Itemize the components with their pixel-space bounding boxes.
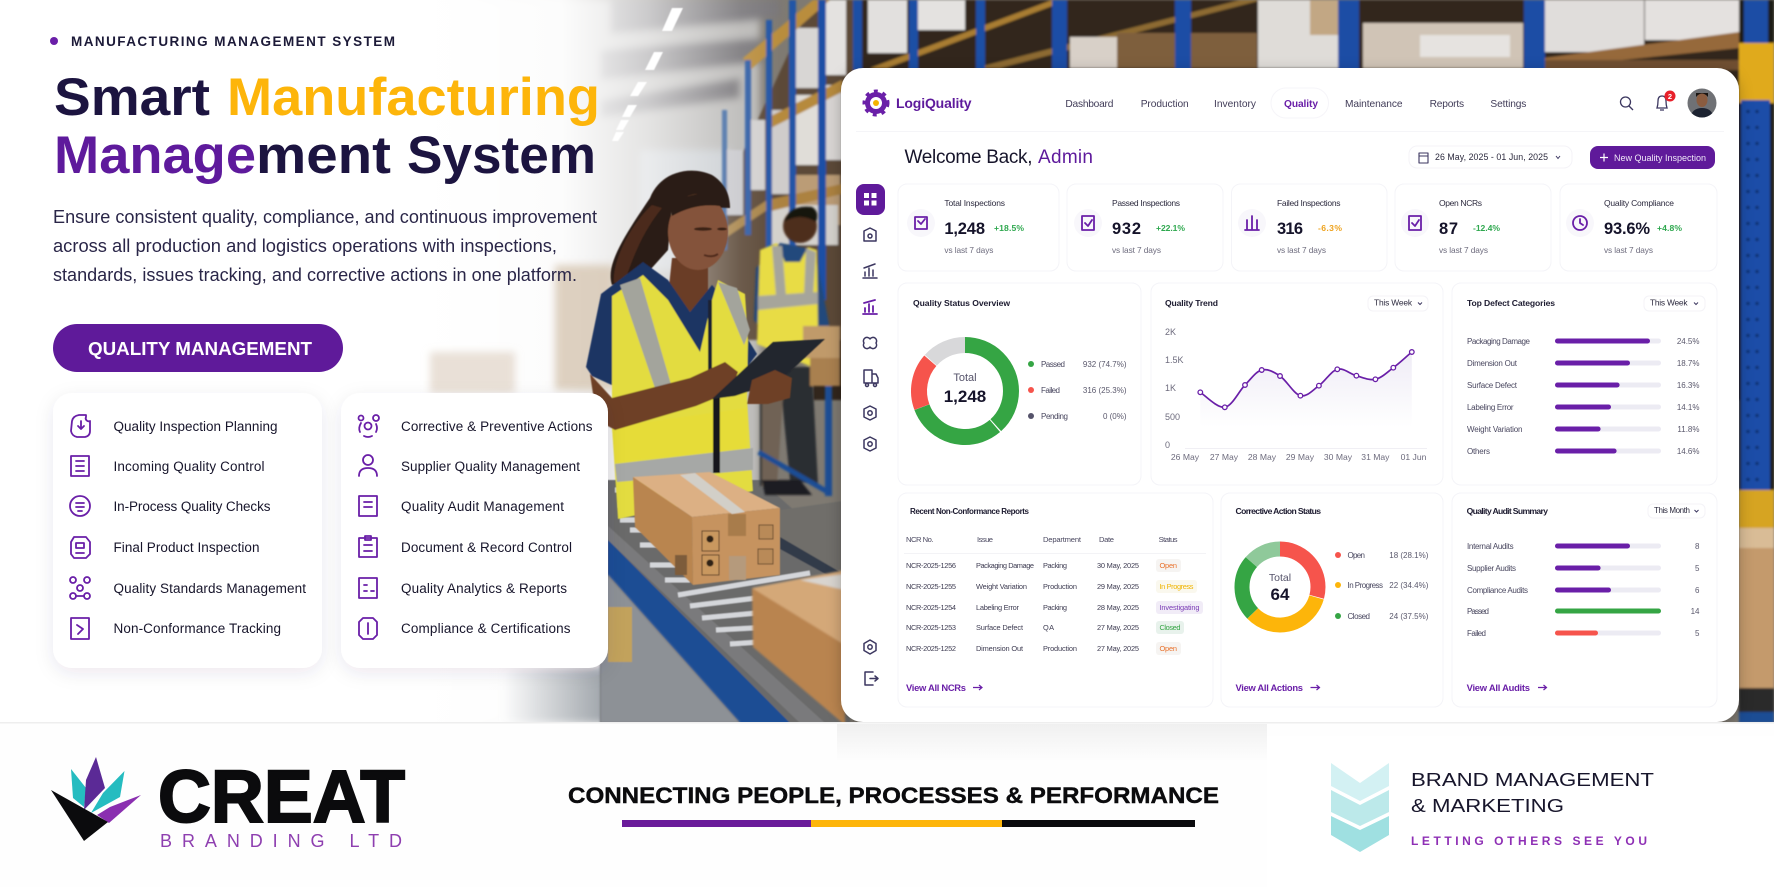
KPI: quality compliance — [1560, 184, 1717, 271]
bar chart: defects: Dimension Out — [1467, 359, 1518, 368]
panel: quality features left — [53, 393, 322, 668]
legend: status: 0 (0%) — [1103, 412, 1127, 421]
intro paragraph: Ensure consistent quality, compliance, and continuous improvement — [53, 207, 597, 227]
line chart: 01 Jun — [1401, 452, 1427, 462]
KPI: open NCRs: Open NCRs — [1439, 198, 1482, 208]
KPI: open NCRs: -12.4% — [1473, 223, 1500, 233]
feature: analytics — [359, 578, 567, 598]
panel: quality features right — [341, 393, 608, 668]
table row 5 — [906, 642, 1181, 655]
date range picker: 26 May, 2025 - 01 Jun, 2025 — [1435, 152, 1548, 162]
feature: incoming control — [71, 456, 264, 476]
KPI: total inspections: Total Inspections — [944, 198, 1005, 208]
table row 2: In Progress — [1160, 582, 1194, 591]
feature: inspection planning: Quality Inspection Planning — [114, 419, 278, 434]
welcome heading — [904, 147, 1093, 168]
line chart: 31 May — [1361, 452, 1390, 462]
KPI: total inspections — [898, 184, 1059, 271]
table row 3 — [906, 601, 1203, 614]
arms — [590, 362, 738, 430]
panel: quality status overview — [898, 283, 1141, 485]
KPI: failed inspections: -6.3% — [1318, 223, 1342, 233]
feature: incoming control: Incoming Quality Control — [114, 459, 264, 474]
brand: LogiQuality: LogiQuality — [896, 95, 972, 111]
tablet — [712, 339, 825, 399]
KPI: quality compliance: +4.8% — [1657, 223, 1682, 233]
link: view all actions: View All Actions — [1236, 682, 1303, 693]
table row 4: 27 May, 2025 — [1097, 623, 1139, 632]
KPI: passed inspections: vs last 7 days — [1112, 245, 1161, 255]
bar chart: audits — [1467, 542, 1700, 638]
line chart: 27 May — [1210, 452, 1239, 462]
button: quality management — [53, 324, 343, 372]
link: view all audits: View All Audits — [1467, 682, 1530, 693]
legend: status: Passed — [1041, 360, 1065, 369]
table header: Department — [1043, 535, 1082, 544]
panel: corrective action status: Total — [1269, 572, 1291, 584]
donut chart: actions — [1226, 533, 1334, 641]
filter: this week: This Week — [1374, 298, 1413, 308]
legend: status: 932 (74.7%) — [1083, 360, 1127, 369]
feature: compliance: Compliance & Certifications — [401, 621, 571, 636]
conveyor with rollers — [600, 480, 850, 730]
feature: in-process checks — [70, 496, 271, 516]
bar chart: audits: 6 — [1695, 586, 1700, 595]
panel: corrective action status — [1221, 493, 1443, 707]
bar chart: defects: Labeling Error — [1467, 403, 1514, 412]
date range picker — [1409, 146, 1572, 168]
KPI: quality compliance: Quality Compliance — [1604, 198, 1674, 208]
table row 1: Open — [1160, 561, 1177, 570]
filter: this week — [1368, 296, 1428, 311]
legend: actions: 24 (37.5%) — [1389, 612, 1429, 621]
hair — [611, 171, 730, 285]
bar chart: defects: 24.5% — [1677, 337, 1700, 346]
legend: status: Pending — [1041, 412, 1068, 421]
bar chart: defects: Surface Defect — [1467, 381, 1518, 390]
navigation: Reports — [1430, 99, 1464, 110]
KPI: failed inspections — [1232, 184, 1387, 271]
tagline — [568, 783, 1219, 827]
perspective shelves left of dashboard — [795, 28, 819, 88]
bar chart: audits: 8 — [1695, 542, 1700, 551]
navigation — [1065, 88, 1526, 118]
table row 4: NCR-2025-1253 — [906, 623, 956, 632]
table header: NCR No. — [906, 535, 934, 544]
feature: final inspection: Final Product Inspection — [114, 540, 260, 555]
button: new quality inspection: New Quality Inspection — [1614, 153, 1706, 163]
line chart: 28 May — [1248, 452, 1277, 462]
table row 5: 27 May, 2025 — [1097, 644, 1139, 653]
blurred boxes behind worker — [430, 265, 615, 723]
logo: chevrons mark — [1331, 763, 1389, 852]
eyebrow label: MANUFACTURING MANAGEMENT SYSTEM — [71, 34, 395, 49]
filter: this week — [1644, 296, 1705, 311]
bar chart: defects: 14.6% — [1677, 447, 1700, 456]
feature: non-conformance — [71, 618, 281, 639]
title: Manage — [54, 126, 256, 185]
feature: final inspection — [71, 537, 260, 558]
feature: standards — [70, 577, 306, 599]
bar chart: defects: 18.7% — [1677, 359, 1700, 368]
KPI: failed inspections: Failed Inspections — [1277, 198, 1340, 208]
feature: compliance — [359, 618, 571, 639]
bar chart: audits: Passed — [1467, 607, 1489, 616]
divider — [856, 131, 1724, 132]
KPI: total inspections: 1,248 — [944, 220, 985, 238]
table row 1: Packing — [1043, 561, 1067, 570]
KPI: total inspections: vs last 7 days — [944, 245, 993, 255]
navigation: Maintenance — [1345, 99, 1403, 110]
table row 5: Open — [1160, 644, 1177, 653]
feature: standards: Quality Standards Management — [114, 581, 306, 596]
KPI: passed inspections — [1067, 184, 1223, 271]
table row 5: NCR-2025-1252 — [906, 644, 956, 653]
bar chart: defects: Packaging Damage — [1467, 337, 1531, 346]
legend: actions: 18 (28.1%) — [1389, 551, 1429, 560]
bar chart: defects: Others — [1467, 447, 1490, 456]
table header — [904, 535, 1206, 554]
KPI: open NCRs: 87 — [1439, 220, 1458, 238]
panel: quality status overview: Total — [953, 372, 977, 384]
dashboard window — [841, 68, 1739, 722]
filter: this month — [1648, 504, 1705, 518]
panel: quality status overview: Quality Status Overview — [913, 298, 1010, 308]
bar chart: defects: 11.8% — [1677, 425, 1700, 434]
panel: recent non-conformance reports: Recent Non-Conformance Reports — [910, 507, 1030, 516]
title: Manufacturing — [227, 68, 600, 127]
table header: Status — [1159, 535, 1178, 544]
panel: top defect categories: Top Defect Categories — [1467, 298, 1555, 308]
logo: CREAT wordmark: CREAT — [158, 755, 405, 838]
table row 4: Surface Defect — [976, 623, 1023, 632]
bar chart: audits: 14 — [1691, 607, 1700, 616]
panel: quality audit summary: Quality Audit Summary — [1467, 506, 1548, 516]
icon: notification bell — [1657, 90, 1676, 110]
legend: actions: In Progress — [1348, 581, 1383, 590]
feature: document control — [359, 536, 572, 557]
hand holding tablet — [747, 370, 792, 404]
welcome heading: Admin — [1038, 147, 1093, 168]
ceiling lights — [612, 8, 683, 141]
line chart: 29 May — [1286, 452, 1315, 462]
bar chart: audits: Supplier Audits — [1467, 564, 1516, 573]
main worker with tablet — [586, 171, 825, 519]
logo: CREAT wordmark: BRANDING LTD — [160, 831, 402, 851]
donut chart: status — [900, 326, 1030, 456]
panel: quality trend: Quality Trend — [1165, 298, 1218, 308]
table row 2: Weight Variation — [976, 582, 1027, 591]
white fade over photo — [0, 0, 780, 723]
feature: supplier quality: Supplier Quality Management — [401, 459, 580, 474]
line chart: 1K — [1165, 383, 1176, 393]
KPI: passed inspections: +22.1% — [1156, 223, 1185, 233]
table row 4: QA — [1043, 623, 1054, 632]
KPI: passed inspections: Passed Inspections — [1112, 198, 1180, 208]
filter: this month: This Month — [1654, 506, 1690, 515]
line chart: 1.5K — [1165, 355, 1184, 365]
line chart: 0 — [1165, 440, 1170, 450]
table row 1: NCR-2025-1256 — [906, 561, 956, 570]
title: ment — [256, 126, 391, 185]
background worker — [754, 207, 840, 496]
KPI: failed inspections: 316 — [1277, 220, 1303, 238]
icon: search — [1620, 97, 1633, 110]
table row 3: 28 May, 2025 — [1097, 603, 1139, 612]
line chart: 2K — [1165, 327, 1176, 337]
bar chart: audits: 5 — [1695, 564, 1700, 573]
table row 1 — [906, 559, 1181, 572]
brand management text: LETTING OTHERS SEE YOU — [1411, 834, 1647, 848]
legend: actions — [1335, 551, 1429, 621]
table row 3: Investigating — [1160, 603, 1200, 612]
table row 3: NCR-2025-1254 — [906, 603, 956, 612]
sidebar navigation — [856, 184, 885, 685]
upper strip racks — [868, 0, 907, 53]
legend: actions: Open — [1348, 551, 1365, 560]
right column — [1739, 0, 1774, 723]
legend: status: 316 (25.3%) — [1083, 386, 1127, 395]
feature: inspection planning — [71, 415, 278, 437]
bar chart: audits: 5 — [1695, 629, 1700, 638]
KPI: open NCRs: vs last 7 days — [1439, 245, 1488, 255]
title: Smart — [54, 68, 210, 127]
button: quality management: QUALITY MANAGEMENT — [88, 339, 312, 359]
feature: non-conformance: Non-Conformance Tracking — [114, 621, 281, 636]
cardboard box on conveyor — [633, 472, 780, 585]
cardboard box foreground — [752, 570, 845, 725]
feature: audit management — [359, 496, 564, 516]
panel: quality trend — [1151, 283, 1443, 485]
panel: quality status overview: 1,248 — [944, 387, 986, 406]
line chart: 500 — [1165, 412, 1180, 422]
navigation: Settings — [1490, 99, 1526, 110]
KPI: quality compliance: vs last 7 days — [1604, 245, 1653, 255]
welcome heading: Welcome Back, — [904, 147, 1032, 168]
table header: Issue — [977, 535, 993, 544]
table row 1: 30 May, 2025 — [1097, 561, 1139, 570]
legend: status — [1028, 360, 1127, 421]
navigation: Quality — [1284, 99, 1318, 110]
KPI: total inspections: +18.5% — [994, 223, 1024, 233]
legend: actions: 22 (34.4%) — [1389, 581, 1429, 590]
avatar — [1687, 88, 1717, 118]
navigation: Dashboard — [1065, 99, 1114, 110]
intro paragraph: across all production and logistics operations with inspections, — [53, 236, 557, 256]
KPI: quality compliance: 93.6% — [1604, 220, 1650, 238]
logo: CREAT mark — [51, 757, 141, 841]
table row 4 — [906, 621, 1184, 634]
feature: corrective actions — [358, 415, 593, 437]
link: view all NCRs: View All NCRs — [906, 682, 966, 693]
tricolour bar — [622, 820, 1195, 827]
panel: corrective action status: 64 — [1271, 585, 1290, 604]
navigation: Production — [1141, 99, 1189, 110]
panel: top defect categories — [1452, 283, 1717, 485]
table row 2 — [906, 580, 1197, 593]
table row 2: Production — [1043, 582, 1077, 591]
table header: Date — [1099, 535, 1114, 544]
bar chart: defects — [1467, 337, 1700, 456]
panel: corrective action status: Corrective Action Status — [1236, 506, 1321, 516]
footer band — [0, 722, 1774, 887]
tagline: CONNECTING PEOPLE, PROCESSES & PERFORMANCE — [568, 783, 1219, 808]
feature: document control: Document & Record Control — [401, 540, 572, 555]
brand management text: BRAND MANAGEMENT — [1411, 769, 1654, 790]
brand management text: & MARKETING — [1411, 795, 1564, 816]
button: new quality inspection — [1590, 146, 1715, 169]
table row 4: Closed — [1160, 623, 1180, 632]
table row 3: Packing — [1043, 603, 1067, 612]
brand: LogiQuality — [864, 91, 972, 115]
table row 5: Dimension Out — [976, 644, 1023, 653]
navigation: Inventory — [1214, 99, 1257, 110]
brand management text — [1411, 769, 1654, 848]
bar chart: audits: Failed — [1467, 629, 1486, 638]
feature: audit management: Quality Audit Management — [401, 499, 564, 514]
legend: status: Failed — [1041, 386, 1060, 395]
intro paragraph — [53, 207, 597, 285]
table row 2: 29 May, 2025 — [1097, 582, 1139, 591]
panel: quality audit summary — [1452, 493, 1717, 707]
bar chart: audits: Internal Audits — [1467, 542, 1514, 551]
legend: actions: Closed — [1348, 612, 1370, 621]
intro paragraph: standards, issues tracking, and corrective actions in one platform. — [53, 265, 577, 285]
table row 5: Production — [1043, 644, 1077, 653]
face — [668, 194, 728, 270]
KPI: open NCRs — [1395, 184, 1551, 271]
table row 2: NCR-2025-1255 — [906, 582, 956, 591]
bar chart: defects: 14.1% — [1677, 403, 1700, 412]
line chart: 30 May — [1324, 452, 1353, 462]
bar chart: defects: 16.3% — [1677, 381, 1700, 390]
neck — [668, 258, 708, 312]
table row 3: Labeling Error — [976, 603, 1020, 612]
vest — [612, 275, 753, 519]
bar chart: defects: Weight Variation — [1467, 425, 1522, 434]
KPI: passed inspections: 932 — [1112, 220, 1141, 238]
line chart: 26 May — [1171, 452, 1200, 462]
table row 1: Packaging Damage — [976, 561, 1034, 570]
navy shirt — [586, 262, 757, 392]
bar chart: audits: Compliance Audits — [1467, 586, 1528, 595]
feature: supplier quality — [359, 455, 580, 476]
feature: corrective actions: Corrective & Preventive Actions — [401, 419, 593, 434]
KPI: failed inspections: vs last 7 days — [1277, 245, 1326, 255]
filter: this week: This Week — [1650, 298, 1688, 308]
icon: notification bell: 2 — [1668, 92, 1672, 101]
feature: analytics: Quality Analytics & Reports — [401, 581, 567, 596]
feature: in-process checks: In-Process Quality Checks — [114, 499, 271, 514]
line chart — [1165, 327, 1427, 462]
panel: recent non-conformance reports — [898, 493, 1213, 707]
title: System — [407, 126, 596, 185]
title — [54, 68, 600, 185]
